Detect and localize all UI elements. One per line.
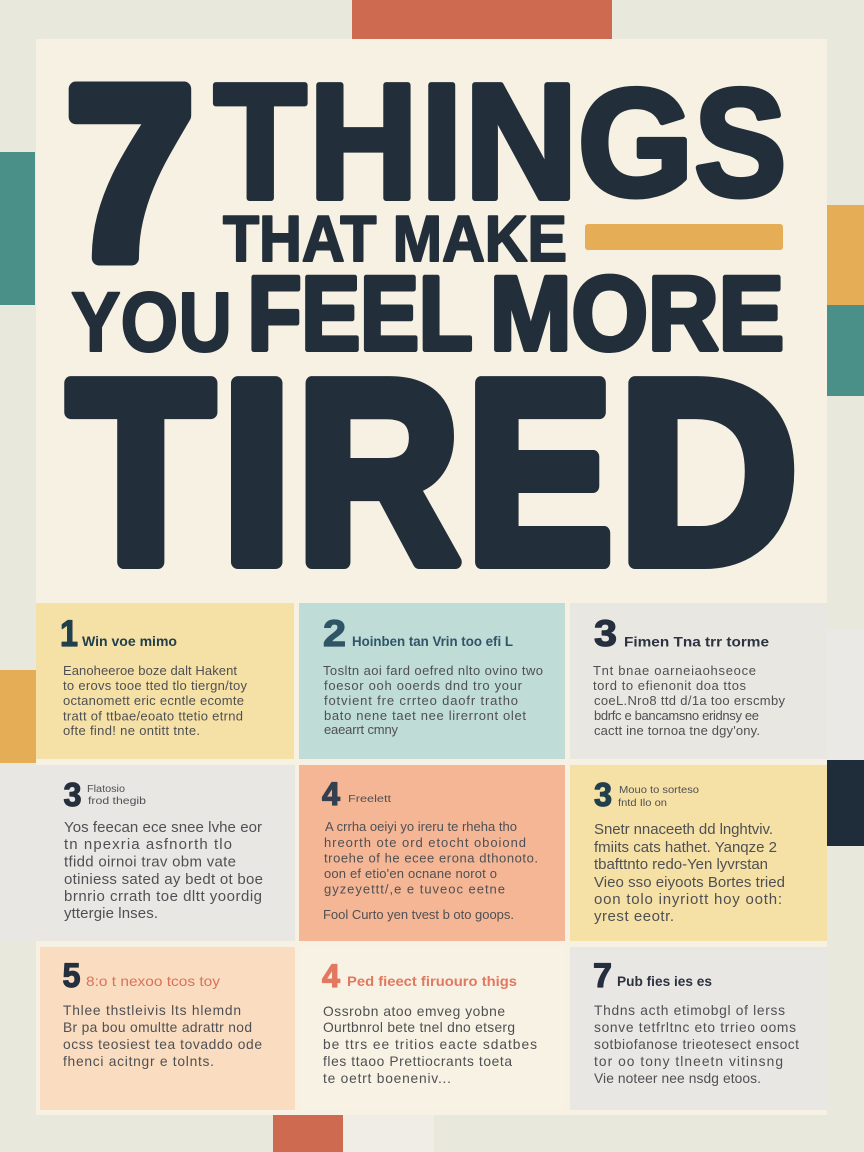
heading: Hoinben tan Vrin too efi L xyxy=(352,633,513,649)
title: YOU: YOU xyxy=(71,275,232,369)
body text: fmiits cats hathet. Yanqze 2 xyxy=(594,839,777,856)
body text: Fool Curto yen tvest b oto goops. xyxy=(323,907,514,922)
body text: troehe of he ecee erona dthonoto. xyxy=(324,850,538,866)
title: TIRED: E xyxy=(466,328,613,618)
number 4: 4 xyxy=(322,958,340,994)
title: FEEL MORE xyxy=(248,256,784,372)
title: TIRED: T xyxy=(68,328,214,618)
card 8 xyxy=(299,947,565,1110)
body text: gyzeyettt/,e e tuveoc eetne xyxy=(324,882,505,896)
card 2 xyxy=(299,603,565,759)
number 3: 3 xyxy=(594,776,612,813)
body text: foesor ooh ooerds dnd tro your xyxy=(324,678,523,693)
title xyxy=(66,37,798,618)
body text: octanomett eric ecntle ecomte xyxy=(63,693,244,708)
body text: tord to efienonit doa ttos xyxy=(593,678,746,693)
card 6 xyxy=(570,765,827,941)
title: THINGS: N xyxy=(464,50,578,233)
card 5 xyxy=(299,765,565,941)
body text xyxy=(593,663,786,738)
heading: Mouo to sorteso xyxy=(619,785,699,796)
heading: Win voe mimo xyxy=(82,633,177,649)
title: TIRED xyxy=(68,328,798,618)
body text xyxy=(64,819,263,922)
body text xyxy=(63,663,248,738)
heading: fntd Ilo on xyxy=(618,798,667,809)
body text: Tosltn aoi fard oefred nlto ovino two xyxy=(323,663,543,678)
title: 7: 7 xyxy=(66,37,194,311)
body text: Vie noteer nee nsdg etoos. xyxy=(594,1071,761,1086)
body text: fles ttaoo Prettiocrants toeta xyxy=(323,1054,512,1069)
body text: Br pa bou omultte adrattr nod xyxy=(63,1020,252,1035)
body text xyxy=(323,663,543,737)
title: THINGS xyxy=(214,50,786,233)
body text xyxy=(594,821,785,925)
heading: frod thegib xyxy=(88,796,147,807)
number 4: 4 xyxy=(322,776,340,812)
number 3: 3 xyxy=(64,776,82,813)
heading: 8:o t nexoo tcos toy xyxy=(86,973,220,989)
heading: Pub fies ies es xyxy=(617,973,712,989)
body text: Tnt bnae oarneiaohseoce xyxy=(593,663,756,678)
title: FEEL MORE: FEEL xyxy=(248,256,473,372)
number 1: 1 xyxy=(60,613,78,654)
body text: tor oo tony tlneetn vitinsng xyxy=(594,1054,783,1069)
number 7: 7 xyxy=(593,957,612,995)
card 7 xyxy=(40,947,295,1110)
body text: Ossrobn atoo emveg yobne xyxy=(323,1004,505,1019)
heading xyxy=(87,784,147,807)
title: TIRED: D xyxy=(618,328,798,618)
title: THINGS: H xyxy=(309,50,418,233)
heading: Fimen Tna trr torme xyxy=(624,634,769,650)
body text: bato nene taet nee lirerront olet xyxy=(324,708,526,723)
body text: otiniess sated ay bedt ot boe xyxy=(64,871,263,888)
body text: A crrha oeiyi yo ireru te rheha tho xyxy=(325,819,517,834)
title: FEEL MORE: MORE xyxy=(490,256,784,372)
heading: Freelett xyxy=(348,794,391,805)
card 4 xyxy=(0,765,295,941)
body text: tratt of ttbae/eoato ttetio etrnd xyxy=(63,708,243,724)
body text: Vieo sso eiyoots Bortes tried xyxy=(594,874,785,891)
body text: tn npexria asfnorth tlo xyxy=(64,836,232,853)
title: THINGS: S xyxy=(694,58,786,228)
title: TIRED: R xyxy=(296,328,460,618)
body text: Ourtbnrol bete tnel dno etserg xyxy=(323,1020,515,1035)
number 2: 2 xyxy=(323,613,346,654)
body text: to erovs tooe tted tlo tiergn/toy xyxy=(63,678,248,693)
body text: te oetrt boeneniv... xyxy=(323,1071,451,1086)
body text: Eanoheeroe boze dalt Hakent xyxy=(63,663,237,678)
body text: Snetr nnaceeth dd lnghtviv. xyxy=(594,821,773,838)
body text: Thlee thstleivis lts hlemdn xyxy=(63,1003,241,1018)
body text: yttergie lnses. xyxy=(64,905,158,922)
title: THINGS: G xyxy=(578,58,693,228)
body text xyxy=(323,1004,537,1086)
body text xyxy=(594,1003,799,1086)
title: THINGS: I xyxy=(421,50,462,233)
card 3 xyxy=(570,603,827,759)
heading: Ped fieect firuouro thigs xyxy=(347,973,517,989)
title: TIRED: I xyxy=(221,328,293,618)
number 5: 5 xyxy=(62,957,80,995)
body text: sotbiofanose trieotesect ensoct xyxy=(594,1037,799,1052)
body text: eaearrt cmny xyxy=(324,722,398,737)
number 3: 3 xyxy=(594,613,617,654)
body text: Yos feecan ece snee lvhe eor xyxy=(64,819,262,836)
body text: Thdns acth etimobgl of lerss xyxy=(594,1003,785,1018)
body text: fotvient fre crrteo daofr tratho xyxy=(324,693,518,708)
body text: be ttrs ee tritios eacte sdatbes xyxy=(323,1037,537,1052)
body text: oon ef etio'en ocnane norot o xyxy=(324,866,497,881)
body text: hreorth ote ord etocht oboiond xyxy=(324,835,526,850)
body text xyxy=(323,819,538,922)
body text: ocss teosiest tea tovaddo ode xyxy=(63,1037,262,1052)
body text: tfidd oirnoi trav obm vate xyxy=(64,854,236,870)
body text: yrest eeotr. xyxy=(594,908,674,925)
title: THAT MAKE: THAT MAKE xyxy=(223,202,567,275)
body text: oon tolo inyriott hoy ooth: xyxy=(594,891,782,908)
title: THINGS: T xyxy=(214,50,306,233)
body text: fhenci acitngr e tolnts. xyxy=(63,1054,214,1069)
card 1 xyxy=(36,603,294,759)
body text: brnrio crrath toe dltt yoordig xyxy=(64,888,262,905)
body text: cactt ine tornoa tne dgy'ony. xyxy=(594,723,760,738)
body text: sonve tetfrltnc eto trrieo ooms xyxy=(594,1020,796,1035)
card 9 xyxy=(570,947,827,1110)
body text: tbafttnto redo-Yen lyvrstan xyxy=(594,856,768,873)
body text: ofte find! ne ontitt tnte. xyxy=(63,723,200,738)
body text: coeL.Nro8 ttd d/1a too erscmby xyxy=(594,693,786,708)
accent bar xyxy=(585,224,783,250)
body text: bdrfc e bancamsno eridnsy ee xyxy=(594,708,759,723)
heading: Flatosio xyxy=(87,784,125,795)
heading xyxy=(618,785,699,809)
body text xyxy=(63,1003,262,1069)
